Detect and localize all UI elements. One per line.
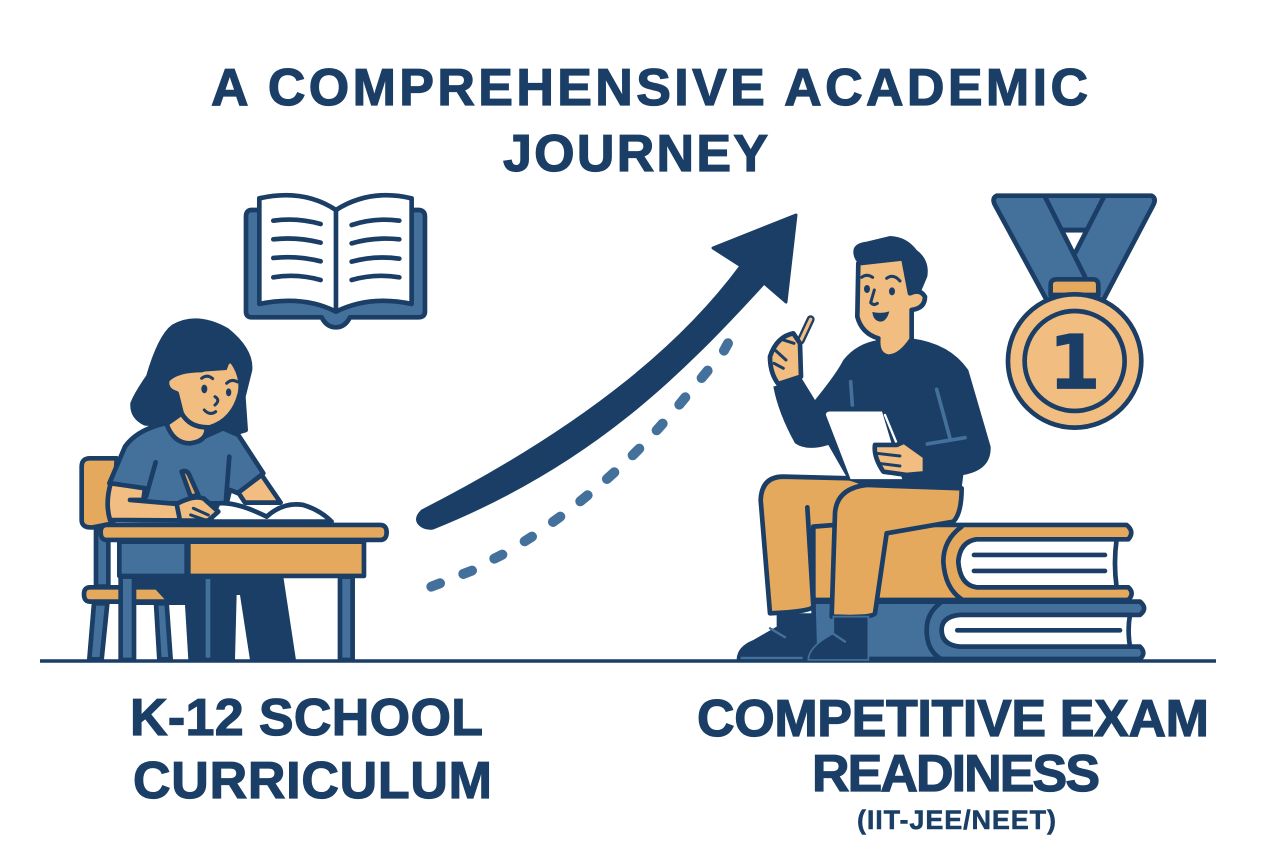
front leg: [832, 485, 962, 617]
clasp: [1051, 279, 1098, 295]
illustration: girl studying at desk: [82, 321, 387, 660]
tablet: [825, 411, 903, 480]
chair: [82, 458, 171, 659]
sweater: [773, 338, 991, 488]
label: K-12 school curriculum: [130, 689, 492, 810]
title: [211, 59, 1088, 183]
medal number: 1: [1048, 318, 1101, 406]
pencil: [801, 319, 811, 341]
hair: [133, 321, 250, 433]
label: competitive exam readiness: (IIT-JEE/NEET): [857, 805, 1056, 835]
label: K-12 school curriculum: K-12 SCHOOL: [130, 689, 483, 747]
notebook: [210, 503, 332, 522]
medal disc: [1008, 294, 1141, 428]
label: competitive exam readiness: [697, 690, 1209, 835]
shirt: [109, 423, 263, 503]
face: [167, 361, 241, 427]
label: competitive exam readiness: COMPETITIVE EXAM: [697, 690, 1209, 748]
title: JOURNEY: [503, 125, 768, 183]
icon: medal: [994, 196, 1155, 428]
neck: [167, 413, 207, 443]
bottom book: [813, 602, 1144, 659]
label: K-12 school curriculum: CURRICULUM: [133, 752, 492, 810]
arrow: dashed path: [431, 343, 728, 587]
raised hand: [770, 333, 801, 384]
title: A COMPREHENSIVE ACADEMIC: [211, 59, 1088, 117]
hair: [853, 236, 928, 295]
top book pages: [958, 539, 1117, 587]
back leg: [761, 477, 867, 613]
right hand: [875, 442, 925, 475]
trousers: [132, 577, 296, 660]
desk: [188, 542, 364, 576]
shoes: [737, 613, 813, 660]
icon: open book: [246, 195, 425, 327]
hand: [177, 497, 218, 521]
illustration: man on stacked books: [737, 236, 1144, 660]
arrow: solid growth arrow: [418, 215, 796, 528]
neck and face: [857, 258, 925, 357]
top book: [812, 525, 1132, 600]
arms: [108, 483, 218, 521]
pencil: [182, 471, 198, 497]
ribbon: [994, 196, 1155, 300]
label: competitive exam readiness: READINESS: [812, 745, 1100, 803]
facial features: [862, 275, 900, 322]
ground line: [40, 659, 1216, 663]
